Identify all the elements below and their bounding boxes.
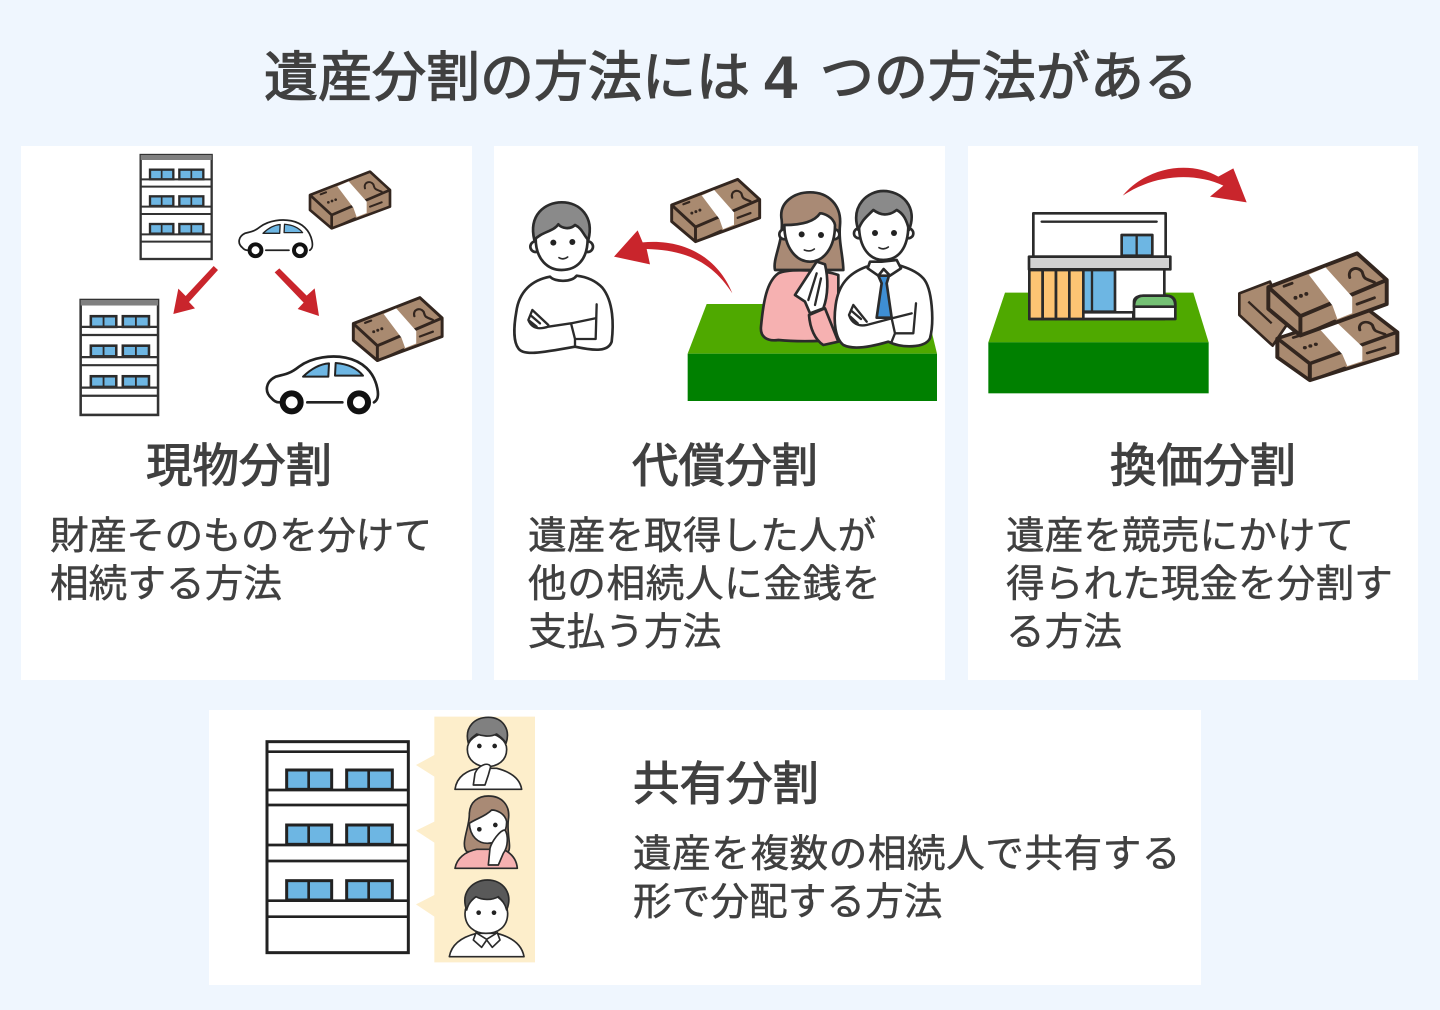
icon: division illustration bbox=[81, 155, 442, 415]
text: 代償分割 description: 支払う方法 bbox=[528, 611, 721, 654]
icon: compensation illustration bbox=[514, 179, 937, 401]
heading: 現物分割: 現物分割 bbox=[146, 440, 332, 492]
arrow: to building bbox=[173, 266, 218, 314]
icon: building after bbox=[81, 300, 158, 415]
text: 換価分割 description: 遺産を競売にかけて bbox=[1006, 515, 1354, 558]
icon: large cash bbox=[353, 298, 442, 361]
text: 共有分割 description: 遺産を複数の相続人で共有する bbox=[633, 833, 1181, 876]
icon: large car bbox=[267, 357, 378, 411]
text: 換価分割 description: 得られた現金を分割す bbox=[1006, 563, 1393, 606]
icon: man in shirt and tie bbox=[835, 191, 932, 347]
icon: small car bbox=[239, 220, 312, 256]
title bbox=[264, 44, 1198, 111]
text: 換価分割 description: る方法 bbox=[1006, 611, 1122, 654]
icon: woman thinking bbox=[455, 796, 517, 868]
arrow: to car and cash bbox=[275, 268, 319, 316]
icon: speech panel bbox=[416, 717, 535, 962]
icon: cash bbox=[672, 179, 760, 242]
icon: building before bbox=[141, 155, 212, 259]
panel: 現物分割 bbox=[21, 146, 472, 680]
text: 現物分割 description: 財産そのものを分けて bbox=[50, 515, 432, 558]
icon: stacks of cash bbox=[1239, 253, 1397, 380]
title: 遺産分割の方法には bbox=[264, 48, 750, 108]
icon: man with collar bbox=[449, 880, 524, 957]
panel: 換価分割 bbox=[968, 146, 1418, 680]
icon: woman praying bbox=[761, 192, 843, 345]
text: 代償分割 description: 他の相続人に金銭を bbox=[528, 563, 881, 606]
icon: man thinking bbox=[455, 717, 522, 789]
arrow: curved to the left bbox=[614, 230, 732, 293]
panel: 共有分割 bbox=[209, 710, 1201, 985]
icon: shared building bbox=[267, 742, 408, 953]
icon: co-ownership illustration bbox=[267, 717, 535, 962]
heading: 共有分割: 共有分割 bbox=[633, 758, 819, 810]
icon: small cash bbox=[310, 172, 390, 228]
icon: land bbox=[688, 304, 937, 401]
arrow: curved to the right bbox=[1123, 168, 1247, 202]
heading: 換価分割: 換価分割 bbox=[1110, 440, 1296, 492]
title: 4 bbox=[764, 44, 798, 111]
icon: land bbox=[988, 293, 1209, 393]
panel: 代償分割 bbox=[494, 146, 945, 680]
icon: man with crossed arms bbox=[514, 202, 613, 353]
icon: conversion illustration bbox=[988, 168, 1397, 393]
icon: house bbox=[1029, 213, 1175, 319]
text: 共有分割 description: 形で分配する方法 bbox=[633, 881, 942, 924]
title: つの方法がある bbox=[820, 48, 1198, 108]
text: 現物分割 description: 相続する方法 bbox=[50, 563, 282, 606]
text: 代償分割 description: 遺産を取得した人が bbox=[528, 515, 876, 558]
heading: 代償分割: 代償分割 bbox=[632, 440, 818, 492]
